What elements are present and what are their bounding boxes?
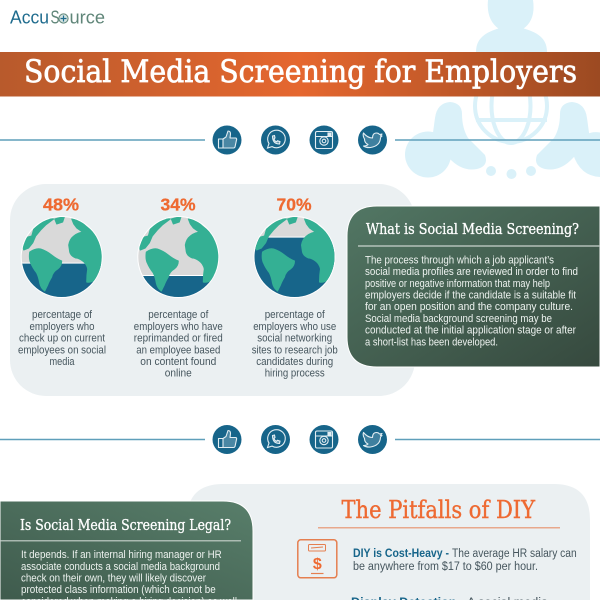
stat 70%: hiring process — [265, 368, 325, 380]
divider with social icons, top — [0, 126, 600, 154]
body text: associate conducts a social media background — [21, 561, 220, 573]
heading: Is Social Media Screening Legal? — [20, 518, 231, 534]
title banner — [0, 52, 600, 96]
stat 34%: reprimanded or fired — [134, 333, 223, 345]
stat 70%: candidates during — [256, 356, 333, 368]
body text: employers decide if the candidate is a suitable fit — [365, 290, 577, 302]
stat 70%: percentage of — [265, 309, 325, 321]
body text: conducted at the initial application stage or after — [365, 324, 576, 336]
stat 70% — [252, 194, 338, 380]
text: DIY is cost-heavy: The average HR salary can — [452, 548, 577, 560]
logo: AccuSource: o — [59, 8, 68, 28]
logo: AccuSource: Accu — [10, 8, 49, 28]
body text: The process through which a job applicant’s — [365, 254, 554, 266]
stat 70%: 70% — [276, 194, 312, 214]
panel: statistics — [10, 184, 415, 396]
divider with social icons, middle — [0, 425, 600, 454]
stat 70%: social networking — [257, 333, 332, 345]
body text: protected class information (which cannot be — [21, 584, 216, 596]
background illustration: people network around globe — [405, 0, 600, 179]
panel: the pitfalls of DIY — [187, 484, 590, 600]
stat 48%: 48% — [43, 194, 79, 214]
stat 48%: employers who — [30, 321, 94, 333]
text: DIY is cost-heavy: DIY is Cost-Heavy - — [353, 548, 449, 560]
body text: a short-list has been developed. — [365, 336, 498, 348]
logo: AccuSource: urce — [70, 8, 105, 28]
body text — [21, 549, 237, 600]
panel: what is social media screening — [347, 206, 600, 367]
stat 34%: online — [165, 368, 192, 380]
body text: positive or negative information that may help — [365, 278, 550, 290]
body text: for an open position and the company culture. — [365, 301, 573, 313]
stat 70%: employers who use — [253, 321, 336, 333]
heading: The Pitfalls of DIY — [342, 496, 536, 524]
icon: dollar bill: $ — [313, 556, 322, 573]
body text: check on their own, they will likely discover — [21, 572, 206, 584]
stat 48%: employees on social — [18, 344, 106, 356]
logo: AccuSource: S — [50, 8, 60, 28]
stat 34%: an employee based — [136, 344, 220, 356]
stat 48% — [18, 194, 106, 368]
stat 70%: sites to research job — [252, 344, 338, 356]
body text: Social media background screening may be — [365, 313, 552, 325]
stat 34% — [134, 194, 223, 380]
body text: It depends. If an internal hiring manager or HR — [21, 549, 222, 561]
stat 48%: media — [50, 356, 75, 368]
icon: dollar bill — [298, 540, 337, 578]
stat 34%: on content found — [140, 356, 216, 368]
stat 34%: employers who have — [134, 321, 223, 333]
logo: AccuSource — [10, 8, 105, 28]
text: DIY is cost-heavy — [353, 548, 577, 573]
body text — [365, 254, 578, 348]
stat 34%: percentage of — [148, 309, 209, 321]
text: DIY is cost-heavy: be anywhere from $17 to $60 per hour. — [353, 561, 538, 573]
panel: is social media screening legal — [0, 501, 253, 600]
stat 48%: percentage of — [32, 309, 93, 321]
stat 48%: check up on current — [19, 333, 106, 345]
stat 34%: 34% — [160, 194, 196, 214]
